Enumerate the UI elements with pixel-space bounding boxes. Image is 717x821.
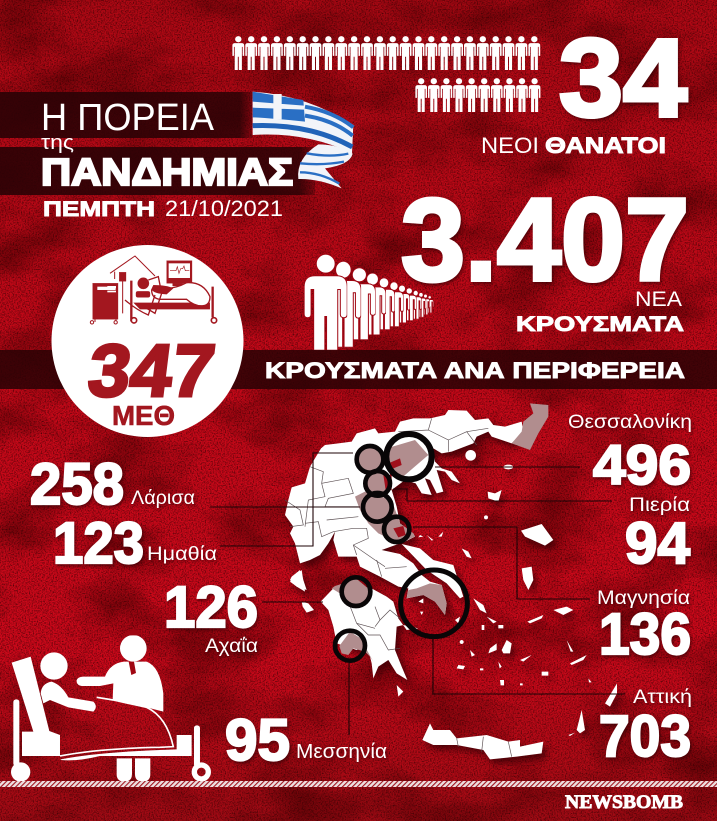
title block: Η ΠΟΡΕΙΑ (41, 97, 215, 139)
map: highlighted region rings (357, 434, 432, 542)
callout: Imathia: 123 (53, 511, 144, 576)
deaths figure: 34 (559, 17, 687, 140)
callout: Attica: Αττική (633, 687, 692, 708)
footer stripe (0, 781, 717, 787)
callout: Achaia: Αχαΐα (205, 636, 258, 657)
regional heading band (0, 350, 717, 389)
map: region borders (285, 418, 488, 567)
deaths label: ΘΑΝΑΤΟΙ (545, 133, 666, 158)
ICU panel (52, 245, 244, 437)
callout: Achaia: 126 (164, 575, 258, 640)
title block: 21/10/2021 (165, 196, 283, 221)
callout: Pieria: 94 (625, 511, 690, 576)
callout lines (210, 453, 625, 735)
icon: Greek flag ribbon (253, 92, 353, 188)
callout: Magnesia: 136 (599, 602, 691, 667)
icon: doctor and patient in bed (11, 630, 208, 782)
deaths label: ΝΕΟΙ (481, 133, 539, 158)
ICU label: ΜΕΘ (112, 400, 175, 431)
regional heading band: ΚΡΟΥΣΜΑΤΑ ΑΝΑ ΠΕΡΙΦΕΡΕΙΑ (265, 358, 685, 383)
new cases figure: 3.407 (401, 174, 689, 305)
new cases label: ΚΡΟΥΣΜΑΤΑ (516, 313, 684, 336)
callout: Thessaloniki: Θεσσαλονίκη (568, 412, 692, 433)
callout: Magnesia: Μαγνησία (597, 588, 690, 609)
title block: ΠΑΝΔΗΜΙΑΣ (41, 152, 293, 194)
map: land and islands (285, 410, 617, 759)
callout: Attica: 703 (599, 704, 691, 769)
new cases label (516, 288, 684, 336)
new cases label: ΝΕΑ (635, 288, 682, 311)
callout: Larissa (30, 452, 195, 517)
ICU number: 347 (84, 329, 219, 412)
callout: Messinia: Μεσσηνία (296, 741, 387, 763)
callout: Imathia (53, 511, 217, 576)
callout: Larissa: Λάρισα (131, 488, 195, 509)
callout: Pieria: Πιερία (629, 495, 690, 516)
title block: ΠΕΜΠΤΗ (43, 198, 155, 221)
map: highlighted region rings south (335, 570, 467, 661)
icon: queue of people (304, 254, 434, 350)
icon: ICU bed (90, 256, 217, 324)
map: affected regions (355, 403, 548, 543)
logo: Newsbomb: NEWSBOMB (565, 792, 683, 813)
callout: Larissa: 258 (30, 452, 124, 517)
callout: Thessaloniki: 496 (593, 433, 691, 496)
deaths label (481, 133, 666, 158)
map: affected regions south (332, 578, 447, 662)
callout: Messinia (225, 708, 387, 773)
callout: Messinia: 95 (225, 708, 290, 773)
callout: Imathia: Ημαθία (147, 544, 217, 565)
icon row: 34 deaths pictogram (232, 36, 540, 112)
map of Greece (285, 403, 617, 759)
title block: της (41, 132, 74, 154)
callout: Thessaloniki (568, 412, 692, 496)
title block (0, 92, 315, 221)
